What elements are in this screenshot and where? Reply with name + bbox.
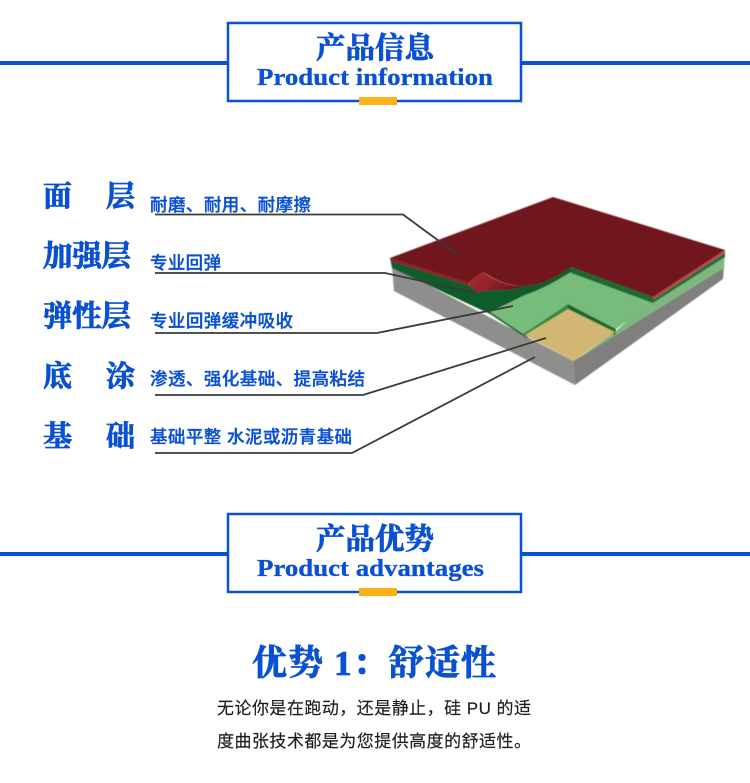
labels: reinforcing layer: 加强层	[43, 240, 132, 273]
heading: Chinese title: 产品优势	[316, 523, 434, 556]
labels: primer: 底	[43, 359, 72, 393]
section header: product information	[0, 23, 750, 105]
labels: foundation: 基础平整 水泥或沥青基础	[150, 427, 352, 447]
labels: foundation: 础	[106, 420, 135, 453]
top layer: highlight edges	[653, 250, 725, 300]
section header: product advantages	[0, 514, 750, 596]
heading: Chinese title: 产品信息	[316, 32, 436, 65]
top layer: peeled corner	[468, 272, 523, 292]
labels: reinforcing layer	[43, 240, 221, 273]
accent: orange bar	[359, 97, 397, 105]
base block: right face	[573, 266, 724, 385]
labels: elastic layer: 弹性层	[43, 300, 132, 333]
heading: English title: Product information	[257, 64, 493, 91]
notch edge: dark green	[571, 266, 653, 303]
top layer: red surface	[390, 197, 725, 297]
labels: elastic layer: 专业回弹缓冲吸收	[150, 311, 293, 331]
labels: primer	[43, 359, 365, 393]
body text: 度曲张技术都是为您提供高度的舒适性。	[217, 732, 531, 751]
labels: top layer: 耐磨、耐用、耐摩擦	[150, 195, 311, 215]
labels: elastic layer	[43, 300, 293, 333]
body text: 无论你是在跑动，还是静止，硅 PU 的适	[217, 699, 531, 718]
labels: foundation: 基	[43, 420, 72, 453]
elastic layer: right strip	[573, 252, 725, 362]
base block: left face	[392, 266, 575, 385]
accent: orange bar	[359, 588, 397, 596]
labels: top layer: 面	[43, 180, 72, 213]
labels: top layer	[43, 180, 311, 215]
reinforcing layer: dark green	[390, 258, 571, 336]
labels: primer: 渗透、强化基础、提高粘结	[150, 369, 365, 389]
layered floor diagram	[390, 197, 725, 385]
body text	[217, 699, 531, 751]
elastic layer: light green surface	[490, 272, 653, 334]
heading: English title: Product advantages	[257, 555, 484, 582]
labels: foundation	[43, 420, 352, 453]
labels: primer: 涂	[106, 360, 136, 393]
heading: advantage 1: 优势 1：舒适性	[252, 644, 496, 683]
primer layer: tan surface	[525, 309, 615, 361]
labels: top layer: 层	[106, 180, 137, 213]
leader lines	[155, 214, 546, 453]
labels: reinforcing layer: 专业回弹	[150, 253, 221, 273]
